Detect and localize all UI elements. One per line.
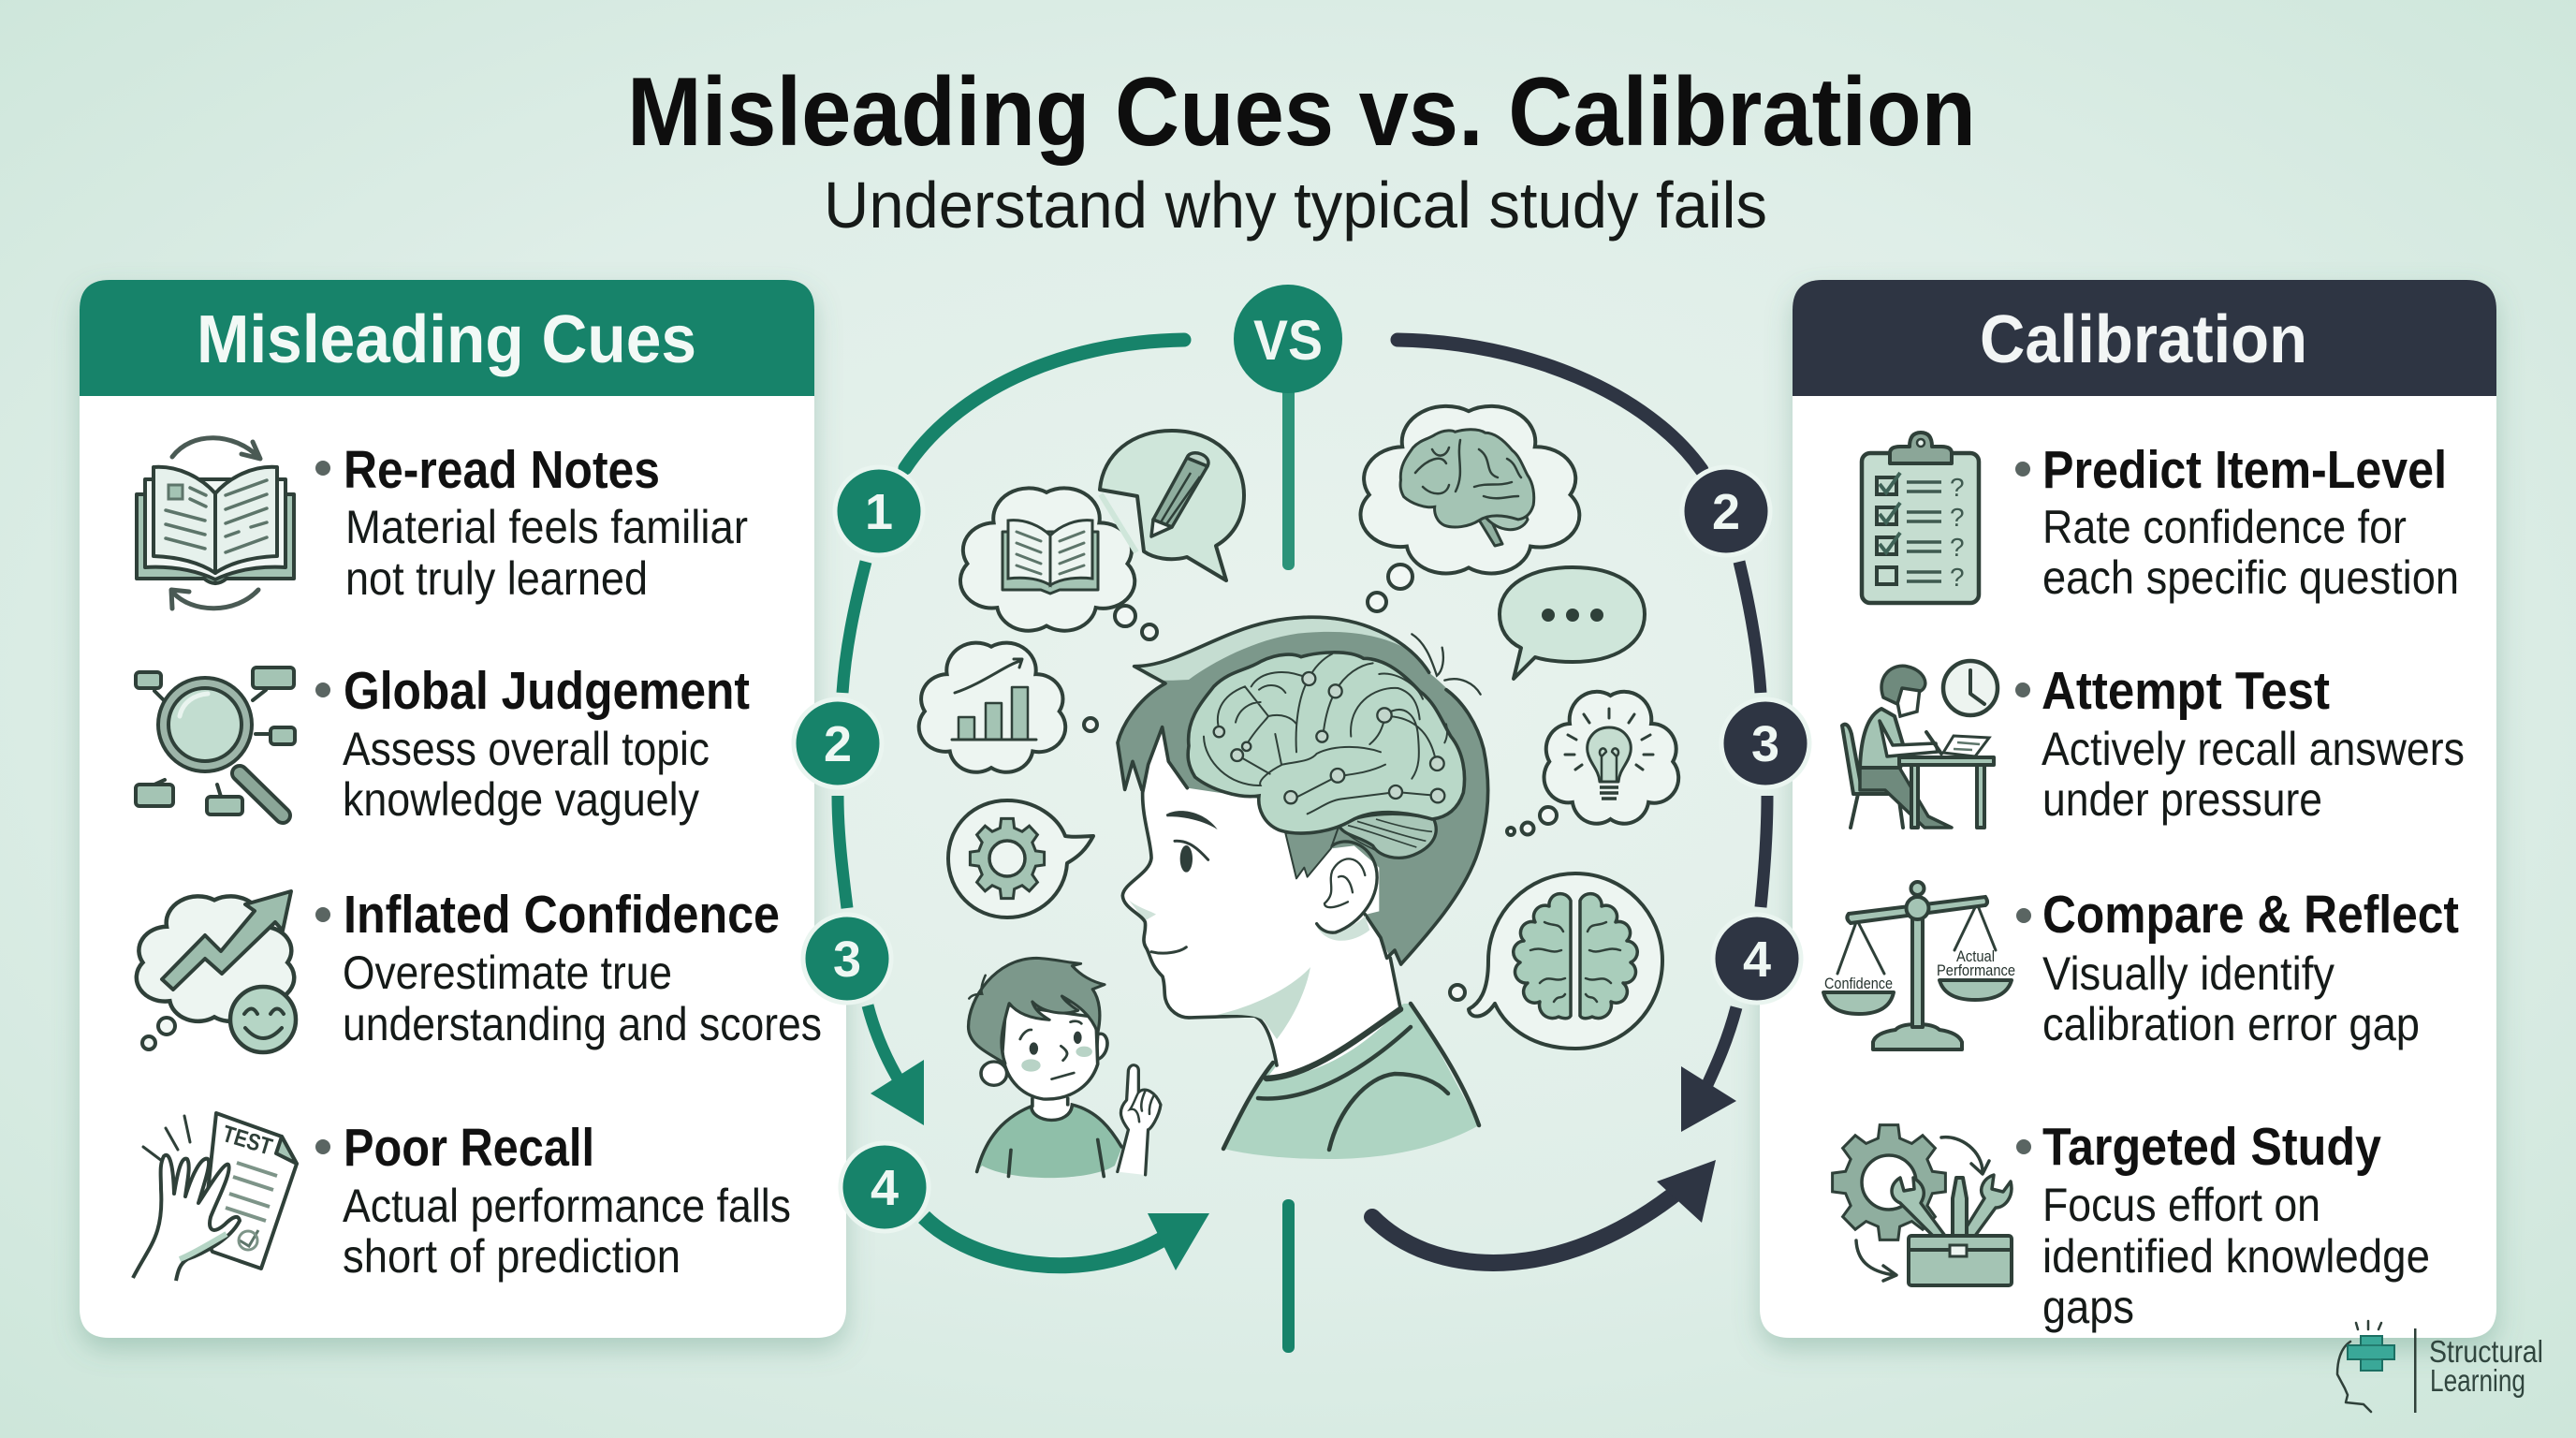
icon: clipboard checklist [1862,433,1979,603]
icon: clipboard checklist: ? [1950,503,1965,532]
child hair [969,958,1105,1064]
lightbulb icon [1565,709,1653,799]
shirt [1223,1004,1479,1159]
illustration: speech bubble with pencil [1100,431,1244,580]
item heading: Attempt Test [2042,661,2330,721]
bullet [2015,682,2030,697]
bullet [315,461,330,476]
logo divider [2414,1328,2417,1413]
face shadow [1129,901,1369,941]
thought dots [1368,565,1412,611]
panel: calibration [1760,280,2496,1338]
item: inflated confidence [137,885,822,1052]
logo wordmark: Learning [2430,1363,2525,1398]
child ears [981,1034,1107,1085]
item description: knowledge vaguely [343,773,699,826]
cerebellum [1339,814,1436,858]
brain folds and nodes [1204,653,1447,814]
thought dots [1507,807,1557,835]
step badge: left 4 [841,1143,929,1231]
item description: identified knowledge [2042,1230,2430,1283]
icon: clipboard checklist: ? [1950,563,1965,592]
scale label: confidence: Confidence [1824,975,1893,992]
step badge: left 3: 3 [833,932,861,988]
bullet [315,682,330,697]
step badge: left 3 [803,915,891,1003]
arrowhead [1657,1160,1716,1223]
item description: Actual performance falls [343,1180,791,1232]
thought dots [1115,606,1157,639]
scale label: actual performance: Performance [1937,961,2015,979]
panel card [1760,280,2496,1338]
step badge: left 2 [794,699,882,787]
book icon [1003,521,1098,594]
item heading: Re-read Notes [344,440,660,500]
icon: clipboard checklist: ? [1950,533,1965,562]
step badge: left 4: 4 [871,1160,899,1216]
logo head icon [2337,1321,2394,1412]
hair outline [1118,617,1488,964]
pencil icon [1151,453,1208,536]
item: global judgement [136,661,750,826]
gear icon [970,818,1045,899]
shirt lines [1223,1004,1479,1150]
item description: each specific question [2042,551,2459,604]
step badge: right 2: 2 [1712,484,1740,540]
right cycle path and arrows [1372,340,1767,1263]
item description [343,723,710,826]
icon: hand with test paper: TEST [219,1121,275,1161]
item description: calibration error gap [2042,998,2420,1050]
neck shadow [1217,967,1310,1039]
hair [1118,617,1488,964]
item: compare and reflect [1823,882,2459,1050]
illustration: worried child pointing [969,958,1161,1178]
item description: understanding and scores [343,998,822,1050]
item description: Visually identify [2042,947,2334,1000]
item description [345,501,748,605]
icon: magnifier with nodes [136,668,295,815]
brain outline [1188,653,1465,833]
illustration: cloud with lightbulb [1507,692,1678,835]
ear [1317,842,1377,932]
item description [2042,947,2420,1050]
item description: Assess overall topic [343,723,710,775]
panel: misleading cues [80,280,846,1338]
item heading: Inflated Confidence [344,885,780,945]
step badge: right 3: 3 [1751,716,1779,772]
illustration: large head with brain [1118,617,1488,1159]
item heading: Poor Recall [344,1118,594,1178]
step badge: left 1 [835,467,923,555]
arrowhead [1681,1066,1736,1132]
item description: Material feels familiar [345,501,748,553]
thought dot [1450,985,1465,1000]
item description: short of prediction [343,1230,681,1283]
vs badge: VS [1253,309,1323,372]
item description: Focus effort on [2042,1179,2320,1231]
item description: Actively recall answers [2042,723,2465,775]
step badge: left 2: 2 [824,716,852,772]
item: poor recall [133,1113,791,1283]
item description: gaps [2042,1281,2134,1333]
child pointing hand [1118,1065,1161,1175]
eye [1175,841,1208,873]
illustration: cloud with brain [1360,406,1579,611]
panel heading: Misleading Cues [197,302,696,377]
bullet [2016,1139,2031,1154]
step badge: right 3 [1721,699,1809,787]
item: predict item-level [1862,433,2459,604]
step badge: right 4 [1713,915,1801,1003]
bullet [2016,908,2031,923]
item heading: Targeted Study [2042,1117,2381,1177]
stray hair strands [1412,634,1481,695]
icon: gear, tools and toolbox [1833,1125,2012,1285]
logo wordmark [2429,1334,2543,1398]
item description: Rate confidence for [2042,501,2407,553]
panel card [80,280,846,1338]
illustration: cloud with book [960,488,1157,639]
illustration: bubble with gear [948,800,1093,917]
bullet [315,1139,330,1154]
item description: not truly learned [345,552,648,605]
subtitle: Understand why typical study fails [824,169,1767,242]
redraw of book cloud edge overlap [1101,494,1136,552]
thought dot [1084,718,1097,731]
item heading: Predict Item-Level [2042,440,2447,500]
item heading: Compare & Reflect [2042,885,2459,945]
item description: under pressure [2042,773,2322,826]
child face [1030,1042,1038,1055]
brain icon [1400,430,1534,546]
illustration: bubble with top-down brain [1450,873,1662,1049]
icon: hand with test paper [133,1113,297,1281]
divider: lower vs line [1282,1199,1295,1353]
face profile line [1122,793,1400,1065]
hair highlight [1135,619,1407,681]
item description [343,946,822,1050]
icon: student at desk with clock [1842,661,1998,828]
mouth [1151,947,1186,953]
vs badge [1234,285,1342,393]
bullet [315,907,330,922]
scale label: actual performance: Actual [1956,947,1995,965]
logo: structural learning [2337,1321,2543,1413]
logo wordmark: Structural [2429,1334,2543,1369]
arrowhead [871,1060,924,1125]
brain icon top view [1514,894,1637,1019]
hair patch beside ear [1285,827,1339,878]
item description: Overestimate true [343,946,672,999]
item: targeted study [1833,1117,2430,1333]
item: re-read notes [137,438,748,609]
bullet [2015,462,2030,477]
item: attempt test [1842,661,2465,828]
illustration: speech bubble with dots [1500,567,1645,679]
item description [2042,723,2465,826]
icon: open book with arrows [137,438,294,609]
left cycle path and arrows [838,340,1209,1270]
item heading: Global Judgement [344,661,750,721]
child head [1003,1005,1098,1099]
icon: clipboard checklist: ? [1950,473,1965,502]
panel header bar [1793,280,2496,396]
divider: upper vs line [1282,339,1295,570]
item description [2042,1179,2430,1333]
item description [2042,501,2459,604]
chart icon [952,659,1036,740]
face [1122,727,1400,1078]
eyebrow [1166,811,1218,829]
step badge: right 4: 4 [1743,932,1771,988]
step badge: right 2 [1682,467,1770,555]
icon: thought cloud, rising arrow and smiley [137,891,296,1052]
arrowhead [1148,1213,1209,1270]
panel header bar [80,280,814,396]
icon: balance scale [1823,882,2015,1049]
child body [977,1105,1121,1178]
scale label: actual performance [1937,947,2015,979]
illustration: cloud with bar chart [919,643,1097,772]
title: Misleading Cues vs. Calibration [627,58,1976,167]
step badge: left 1: 1 [865,484,893,540]
item description [343,1180,791,1283]
panel heading: Calibration [1980,302,2307,377]
circuit nodes [1214,672,1444,803]
